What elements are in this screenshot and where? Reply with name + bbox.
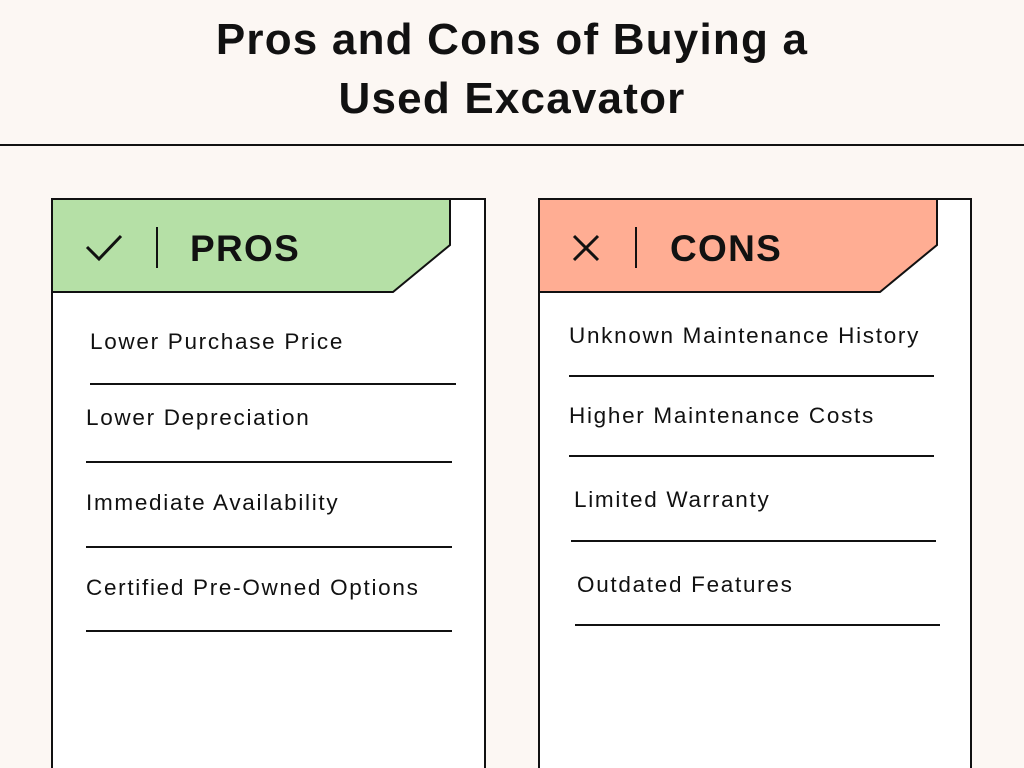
cons heading: CONS xyxy=(670,228,782,269)
title: Used Excavator xyxy=(338,74,685,123)
cons items: Higher Maintenance Costs xyxy=(569,403,875,428)
cons items: Unknown Maintenance History xyxy=(569,323,920,348)
pros items: Certified Pre-Owned Options xyxy=(86,575,420,600)
cons items: Limited Warranty xyxy=(574,487,770,512)
pros items: Lower Depreciation xyxy=(86,405,310,430)
pros header xyxy=(52,199,450,292)
cons header xyxy=(539,199,937,292)
pros items: Lower Purchase Price xyxy=(90,329,344,354)
icon: cross xyxy=(574,236,598,260)
cons items xyxy=(569,323,920,597)
title: Pros and Cons of Buying a xyxy=(216,15,808,64)
icon: checkmark xyxy=(87,236,121,259)
pros items xyxy=(86,329,420,600)
panel: cons card xyxy=(539,199,971,768)
panel: pros card xyxy=(52,199,485,768)
pros items: Immediate Availability xyxy=(86,490,339,515)
title xyxy=(216,15,808,123)
cons items: Outdated Features xyxy=(577,572,794,597)
pros heading: PROS xyxy=(190,228,300,269)
